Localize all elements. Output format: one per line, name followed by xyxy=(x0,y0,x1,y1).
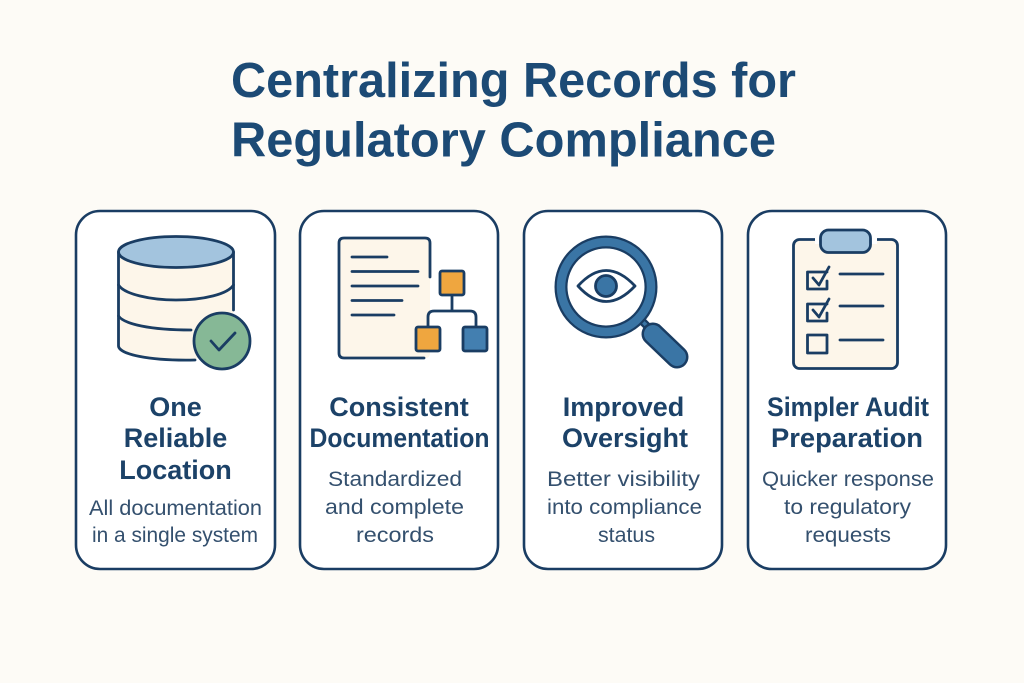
description xyxy=(547,468,702,547)
description: requests xyxy=(805,524,891,547)
heading: Reliable xyxy=(124,423,227,453)
description: Better visibility xyxy=(547,468,701,491)
description: Quicker response xyxy=(762,468,934,491)
heading: Improved xyxy=(563,392,684,422)
description: status xyxy=(598,524,655,547)
description: records xyxy=(356,524,434,547)
heading xyxy=(119,392,232,485)
icon: magnifying glass with eye xyxy=(561,242,677,357)
heading xyxy=(310,392,490,453)
panel: simpler audit preparation xyxy=(748,211,946,569)
title: Centralizing Records for xyxy=(231,54,796,108)
description: into compliance xyxy=(547,496,702,519)
description: in a single system xyxy=(92,524,258,547)
heading: Preparation xyxy=(771,423,923,453)
description: to regulatory xyxy=(784,496,912,519)
description xyxy=(762,468,934,547)
title: Regulatory Compliance xyxy=(231,114,776,168)
description: and complete xyxy=(325,496,464,519)
heading: Simpler Audit xyxy=(767,392,929,422)
panel: one reliable location xyxy=(76,211,275,569)
description: Standardized xyxy=(328,468,462,491)
icon: database with check badge xyxy=(118,236,250,369)
heading xyxy=(562,392,688,453)
description xyxy=(325,468,464,547)
panel: consistent documentation xyxy=(300,211,498,569)
heading: Consistent xyxy=(329,392,469,422)
panel: improved oversight xyxy=(524,211,722,569)
heading: Documentation xyxy=(310,423,490,453)
description xyxy=(89,497,262,547)
heading: Location xyxy=(119,455,232,485)
heading xyxy=(767,392,929,453)
description: All documentation xyxy=(89,497,262,520)
icon: clipboard checklist xyxy=(794,230,898,368)
heading: Oversight xyxy=(562,423,688,453)
heading: One xyxy=(149,392,202,422)
title xyxy=(231,54,796,168)
icon: document with hierarchy xyxy=(339,238,487,358)
